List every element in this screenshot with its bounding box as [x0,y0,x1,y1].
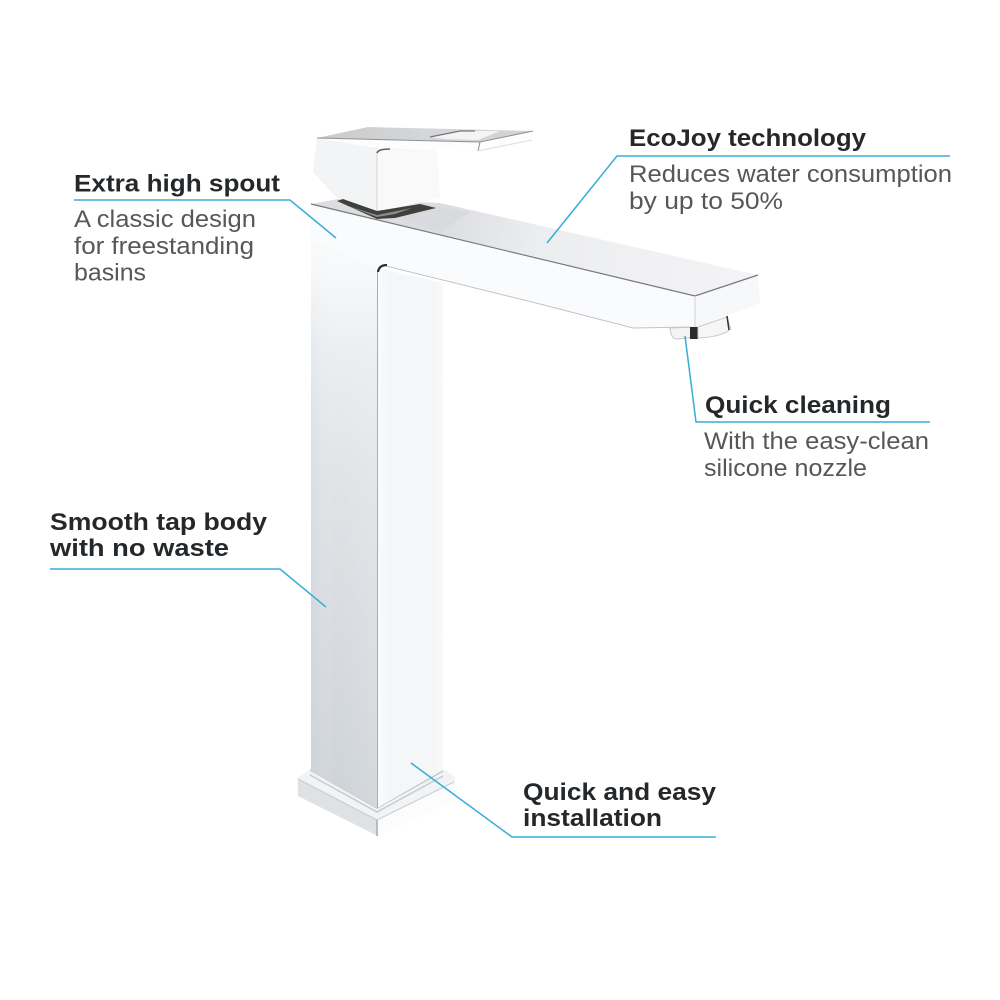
callout: quick cleaning: silicone nozzle [704,455,867,482]
callout: quick cleaning [685,336,930,482]
spout top surface [311,199,758,296]
callout: extra high spout: for freestanding [74,233,254,260]
callout: smooth tap body: Smooth tap body [50,509,268,536]
callout: quick cleaning: Quick cleaning [705,392,891,419]
callout: quick and easy installation: installation [523,805,662,832]
spout end face [695,275,760,326]
callout: EcoJoy technology [547,125,952,243]
faucet illustration [297,127,760,836]
tap body right face [377,268,443,808]
callout: smooth tap body: with no waste [49,535,229,562]
callout: extra high spout: basins [74,260,146,286]
callout: smooth tap body [49,509,326,607]
callout: quick and easy installation [411,763,717,837]
callout: extra high spout: A classic design [74,206,256,233]
callout: extra high spout [74,170,336,286]
callout: extra high spout: Extra high spout [74,170,280,198]
callout: quick cleaning: With the easy-clean [704,428,929,455]
handle body [313,138,440,212]
spout edges [311,204,758,328]
lever plate top [317,127,533,142]
body edges [376,270,378,808]
dark gap under handle [337,199,436,219]
callout: EcoJoy technology: EcoJoy technology [629,125,867,152]
nozzle [670,316,731,339]
callout: EcoJoy technology: Reduces water consumption [629,161,952,188]
callout: EcoJoy technology: by up to 50% [629,188,783,215]
base plate [297,769,455,836]
spout front face [311,204,695,328]
lever plate front [317,131,533,151]
lever handle [313,127,533,219]
tap body left face [311,204,379,808]
callout: quick and easy installation: Quick and easy [523,779,717,806]
